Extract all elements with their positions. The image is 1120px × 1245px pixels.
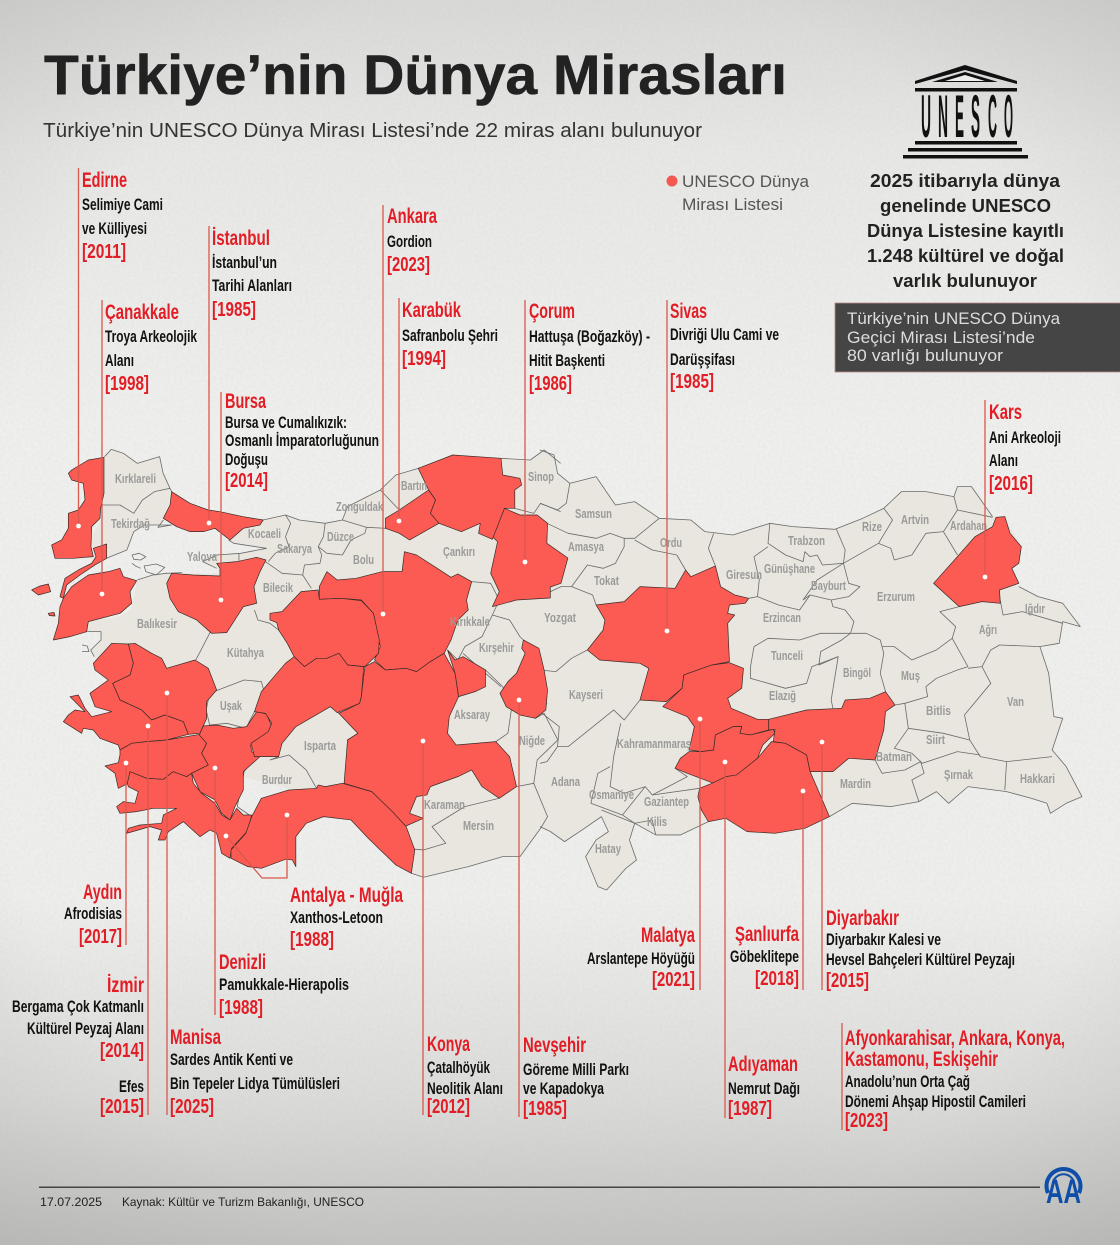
- label: Afyonkarahisar, Ankara, Konya, Kastamonu, Eskişehir: Kastamonu, Eskişehir: [845, 1048, 998, 1071]
- province names: Kilis: [647, 815, 667, 829]
- label: Kars: Alanı: [989, 452, 1018, 470]
- highlighted provinces: east: [587, 517, 1021, 833]
- label: İstanbul: [207, 226, 292, 525]
- label: Aydın: Afrodisias: [64, 905, 122, 923]
- label: Çanakkale: [100, 300, 198, 596]
- label: İzmir: [12, 724, 150, 1118]
- text block: world total: 1.248 kültürel ve doğal: [867, 246, 1064, 266]
- label: Bursa: [219, 390, 379, 602]
- province names: Aksaray: [454, 708, 490, 722]
- province names: Ağrı: [979, 623, 997, 637]
- label: Antalya - Muğla: [224, 813, 403, 951]
- province names: Kayseri: [569, 688, 603, 702]
- title: Türkiye’nin Dünya Mirasları: [44, 43, 787, 106]
- label: Manisa: Bin Tepeler Lidya Tümülüsleri: [170, 1075, 340, 1093]
- Adıyaman: [675, 727, 775, 783]
- province names: Tunceli: [771, 649, 803, 663]
- label: Kars: Kars: [989, 401, 1022, 424]
- icon: UNESCO temple logo: E: [955, 83, 964, 150]
- callout: tentative list: Geçici Mirası Listesi’nde: [847, 329, 1035, 347]
- legend: Mirası Listesi: [682, 195, 783, 214]
- province names: Günüşhane: [764, 562, 815, 576]
- label: Malatya: [587, 717, 702, 991]
- province names: Zonguldak: [336, 500, 383, 514]
- province names: Uşak: [220, 699, 242, 713]
- callout: tentative list: [835, 303, 1120, 372]
- label: İstanbul: Tarihi Alanları: [212, 277, 292, 295]
- province names: Mersin: [463, 819, 494, 833]
- province names: Bitlis: [926, 704, 951, 718]
- Manisa: [113, 643, 217, 734]
- label: Manisa: [165, 691, 340, 1118]
- label: Konya: Çatalhöyük: [427, 1059, 491, 1077]
- label: Konya: [421, 739, 503, 1118]
- province names: Erzincan: [763, 611, 801, 625]
- label: Ankara: [2023]: [387, 254, 430, 276]
- label: İzmir: Efes: [119, 1078, 144, 1096]
- label: Karabük: Karabük: [402, 299, 461, 322]
- footer rule: [39, 1186, 1040, 1188]
- label: Şanlıurfa: Şanlıurfa: [735, 923, 799, 946]
- label: Aydın: [2017]: [79, 926, 122, 948]
- label: Ankara: Ankara: [387, 205, 437, 228]
- callout: tentative list: 80 varlığı bulunuyor: [847, 347, 1004, 365]
- label: Edirne: Edirne: [82, 169, 127, 192]
- label: Aydın: Aydın: [83, 881, 122, 904]
- province names: Tokat: [594, 574, 620, 588]
- province names: Burdur: [262, 773, 292, 787]
- label: Nevşehir: [517, 698, 629, 1120]
- label: Afyonkarahisar, Ankara, Konya, Kastamonu, Eskişehir: Anadolu’nun Orta Çağ: [845, 1073, 970, 1091]
- label: Sivas: [665, 300, 779, 633]
- label: Nevşehir: Nevşehir: [523, 1034, 586, 1057]
- label: Antalya - Muğla: Antalya - Muğla: [290, 884, 403, 907]
- highlighted provinces: Thrace and Marmara: [32, 457, 266, 640]
- Bursa: [167, 557, 266, 633]
- label: Aydın: [64, 761, 128, 948]
- label: Çanakkale: Alanı: [105, 352, 134, 370]
- province names: Elazığ: [769, 689, 796, 703]
- label: İstanbul: [1985]: [212, 299, 256, 321]
- Bozcaada: [48, 612, 55, 616]
- Edirne: [52, 457, 104, 558]
- Afyonkarahisar: [251, 653, 364, 757]
- label: Edirne: ve Külliyesi: [82, 220, 147, 238]
- province names: Bolu: [353, 553, 374, 567]
- Gökçeada: [32, 584, 51, 595]
- label: Malatya: Malatya: [641, 924, 695, 947]
- icon: AA logo: AA: [1046, 1173, 1081, 1211]
- provincial borders: east: [540, 450, 1082, 890]
- label: Bursa: Bursa: [225, 390, 266, 413]
- province names: Bartın: [401, 479, 427, 493]
- label: Kars: Ani Arkeoloji: [989, 429, 1061, 447]
- map of Türkiye: [32, 449, 1082, 890]
- land: western provinces: [87, 449, 546, 877]
- label: Diyarbakır: Diyarbakır Kalesi ve: [826, 931, 941, 949]
- label: Konya: [2012]: [427, 1096, 470, 1118]
- footer: source: Kaynak: Kültür ve Turizm Bakanlığı, UNESCO: [122, 1195, 364, 1209]
- label: Denizli: [213, 766, 349, 1019]
- Çorum: [491, 508, 568, 607]
- province names: Bayburt: [811, 579, 847, 593]
- label: Malatya: Arslantepe Höyüğü: [587, 950, 695, 968]
- label: Karabük: [397, 298, 498, 523]
- province names: Yozgat: [544, 611, 577, 625]
- province names: Ordu: [660, 536, 682, 550]
- icon: UNESCO temple logo: O: [1004, 83, 1013, 150]
- label: Nevşehir: Göreme Milli Parkı: [523, 1061, 629, 1079]
- province names: Yalova: [187, 550, 218, 564]
- text block: world total: genelinde UNESCO: [880, 196, 1051, 216]
- label: Adıyaman: [723, 760, 800, 1120]
- land: eastern provinces: [540, 450, 1082, 890]
- province names: Batman: [876, 750, 912, 764]
- text block: world total: 2025 itibarıyla dünya: [870, 171, 1061, 191]
- label: Afyonkarahisar, Ankara, Konya, Kastamonu, Eskişehir: Dönemi Ahşap Hipostil Camileri: [845, 1093, 1026, 1111]
- icon: UNESCO temple logo: C: [988, 83, 997, 150]
- text block: world total: varlık bulunuyor: [893, 271, 1037, 291]
- subtitle: Türkiye’nin UNESCO Dünya Mirası Listesi’nde 22 miras alanı bulunuyor: [43, 120, 702, 142]
- label: Sivas: Darüşşifası: [670, 351, 735, 369]
- label: Konya: Neolitik Alanı: [427, 1080, 503, 1098]
- province names: Hakkari: [1020, 772, 1055, 786]
- Antalya: [231, 783, 415, 873]
- Diyarbakır: [769, 692, 895, 772]
- province names: Düzce: [327, 530, 354, 544]
- Şanlıurfa: [698, 742, 829, 833]
- icon: UNESCO temple logo: [903, 65, 1028, 158]
- label: Edirne: [76, 168, 163, 528]
- label: Diyarbakır: Hevsel Bahçeleri Kültürel Peyzajı: [826, 951, 1015, 969]
- Eskişehir: [270, 590, 379, 667]
- province names: Ardahan: [950, 519, 987, 533]
- label: Antalya - Muğla: Xanthos-Letoon: [290, 909, 383, 927]
- label: İzmir: Kültürel Peyzaj Alanı: [27, 1020, 144, 1038]
- icon: AA logo: [1046, 1169, 1081, 1211]
- province names: Hatay: [595, 842, 621, 856]
- province names: Tekirdağ: [111, 517, 150, 531]
- province names: Artvin: [901, 513, 929, 527]
- label: Adıyaman: Nemrut Dağı: [728, 1080, 800, 1098]
- label: Malatya: [2021]: [652, 969, 695, 991]
- Kars: [934, 517, 1021, 607]
- province names: Kahramanmaraş: [617, 737, 691, 751]
- label: Bursa: [2014]: [225, 470, 268, 492]
- Denizli: [192, 712, 272, 820]
- label: Kars: [983, 400, 1061, 579]
- Nevşehir: [500, 640, 548, 718]
- label: Denizli: [1988]: [219, 997, 263, 1019]
- label: Çanakkale: Troya Arkeolojik: [105, 328, 198, 346]
- province names: Siirt: [926, 733, 946, 747]
- icon: UNESCO temple logo: N: [938, 83, 948, 150]
- text block: world total: [867, 171, 1064, 291]
- icon: UNESCO temple logo: U: [921, 83, 931, 150]
- province names: Kocaeli: [248, 527, 281, 541]
- Aksaray north highlight: [448, 650, 485, 697]
- Kastamonu: [418, 455, 522, 539]
- label: Çorum: Çorum: [529, 300, 575, 323]
- label: Diyarbakır: Diyarbakır: [826, 907, 899, 930]
- province names: Osmaniye: [589, 788, 634, 802]
- province names: Samsun: [575, 507, 612, 521]
- province names: Erzurum: [877, 590, 915, 604]
- province names: Iğdır: [1025, 602, 1045, 616]
- label: İzmir: [2014]: [100, 1040, 144, 1062]
- label: Çorum: Hitit Başkenti: [529, 352, 605, 370]
- label: Ankara: Gordion: [387, 233, 432, 251]
- label: Sivas: Divriği Ulu Cami ve: [670, 326, 779, 344]
- label: Antalya - Muğla: [1988]: [290, 929, 334, 951]
- label: Bursa: Bursa ve Cumalıkızık:: [225, 414, 347, 432]
- label: İzmir: [2015]: [100, 1096, 144, 1118]
- province names: Trabzon: [788, 534, 825, 548]
- province names: Kırşehir: [479, 641, 514, 655]
- İzmir: [63, 643, 188, 750]
- province names: Amasya: [568, 540, 605, 554]
- label: Karabük: [1994]: [402, 348, 446, 370]
- label: Çorum: Hattuşa (Boğazköy) -: [529, 328, 650, 346]
- legend: [666, 172, 810, 214]
- province names: Muş: [901, 669, 920, 683]
- callout: tentative list: Türkiye’nin UNESCO Dünya: [847, 310, 1061, 328]
- label: Manisa: Manisa: [170, 1026, 221, 1049]
- label: Sivas: [1985]: [670, 371, 714, 393]
- label: İstanbul: İstanbul: [212, 227, 270, 250]
- label: Denizli: Pamukkale-Hierapolis: [219, 976, 349, 994]
- Muğla: [117, 772, 252, 858]
- province names: Giresun: [726, 568, 762, 582]
- Malatya: [663, 663, 769, 752]
- footer: date: 17.07.2025: [40, 1195, 102, 1209]
- label: Karabük: Safranbolu Şehri: [402, 327, 498, 345]
- label: Bursa: Osmanlı İmparatorluğunun: [225, 432, 379, 450]
- Sivas: [587, 566, 749, 702]
- Gelibolu: [60, 544, 107, 598]
- label: Manisa: [2025]: [170, 1096, 214, 1118]
- label: Şanlıurfa: [2018]: [755, 968, 799, 990]
- label: İzmir: Bergama Çok Katmanlı: [12, 998, 144, 1016]
- province names: Kütahya: [227, 646, 265, 660]
- Konya: [339, 653, 517, 827]
- province names: Sakarya: [277, 542, 313, 556]
- provincial borders: west: [82, 449, 561, 877]
- icon: UNESCO temple logo: S: [971, 83, 980, 150]
- label: Adıyaman: [1987]: [728, 1098, 772, 1120]
- Çanakkale: [53, 568, 137, 640]
- label: Konya: Konya: [427, 1033, 470, 1056]
- label: Şanlıurfa: Göbeklitepe: [730, 948, 799, 966]
- label: Afyonkarahisar, Ankara, Konya, Kastamonu, Eskişehir: [842, 1023, 1065, 1132]
- label: Diyarbakır: [2015]: [826, 970, 869, 992]
- Karabük: [385, 490, 439, 540]
- province names: Şırnak: [944, 768, 973, 782]
- label: Çanakkale: Çanakkale: [105, 301, 179, 324]
- label: Edirne: Selimiye Cami: [82, 196, 163, 214]
- province names: Sinop: [528, 470, 554, 484]
- label: Edirne: [2011]: [82, 241, 126, 263]
- label: Manisa: Sardes Antik Kenti ve: [170, 1051, 293, 1069]
- label: Afyonkarahisar, Ankara, Konya, Kastamonu, Eskişehir: [2023]: [845, 1110, 888, 1132]
- province names: Adana: [551, 775, 581, 789]
- highlighted provinces: Aegean: [63, 643, 272, 858]
- Ankara: [319, 552, 472, 672]
- label: Diyarbakır: [820, 740, 1015, 992]
- text block: world total: Dünya Listesine kayıtlı: [867, 221, 1064, 241]
- label: Adıyaman: Adıyaman: [728, 1053, 798, 1076]
- province names: Kırıkkale: [450, 615, 490, 629]
- label: Çanakkale: [1998]: [105, 373, 149, 395]
- province names: Bingöl: [843, 666, 871, 680]
- province names: Karaman: [424, 798, 465, 812]
- label: Ankara: [381, 205, 437, 616]
- province names: Bilecik: [263, 581, 293, 595]
- province names: Rize: [862, 520, 882, 534]
- Aydın: [105, 734, 208, 788]
- label: Çorum: [1986]: [529, 373, 572, 395]
- province names: Balıkesir: [137, 617, 177, 631]
- province names: [111, 470, 1055, 856]
- label: Kars: [2016]: [989, 473, 1033, 495]
- province names: Çankırı: [443, 545, 475, 559]
- legend: UNESCO Dünya: [682, 172, 810, 191]
- label: Denizli: Denizli: [219, 951, 266, 974]
- province names: Kırklareli: [115, 472, 156, 486]
- label: Şanlıurfa: [730, 789, 805, 990]
- label: İzmir: İzmir: [107, 974, 144, 997]
- label: Bursa: Doğuşu: [225, 451, 268, 469]
- label: Sivas: Sivas: [670, 300, 707, 323]
- province names: Niğde: [519, 734, 545, 748]
- province names: Isparta: [304, 739, 337, 753]
- label: Nevşehir: ve Kapadokya: [523, 1080, 605, 1098]
- label: Çorum: [523, 300, 650, 564]
- province names: Mardin: [840, 777, 871, 791]
- label: Nevşehir: [1985]: [523, 1098, 567, 1120]
- label: İstanbul: İstanbul’un: [212, 254, 277, 272]
- highlighted provinces: Central Anatolia and coast: [231, 455, 568, 873]
- province names: Van: [1007, 695, 1024, 709]
- İstanbul: [163, 492, 263, 540]
- province names: Gaziantep: [644, 795, 689, 809]
